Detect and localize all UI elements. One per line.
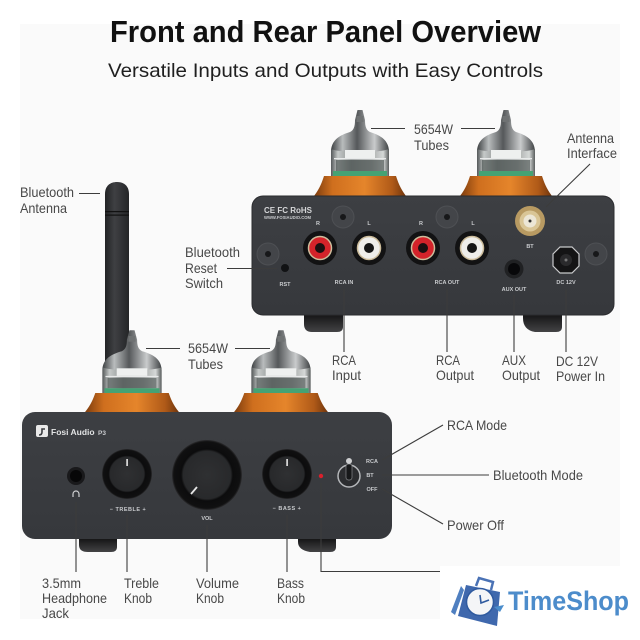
label: RCA output: Output	[436, 367, 474, 383]
bass knob: − BASS +	[273, 506, 301, 512]
reset hole	[281, 264, 289, 272]
label: bluetooth antenna: Antenna	[20, 200, 67, 216]
rear certification marks	[264, 206, 313, 220]
label: volume knob: Knob	[196, 590, 224, 606]
brand logo: Fosi Audio	[51, 427, 95, 437]
treble knob: − TREBLE +	[110, 507, 146, 513]
rear panel labels: R	[419, 221, 423, 227]
RCA output jacks	[406, 231, 489, 265]
label: rear tubes: Tubes	[414, 137, 449, 153]
rear panel labels: L	[367, 221, 371, 227]
label: volume knob: Volume	[196, 575, 239, 591]
switch labels	[366, 459, 378, 493]
rear panel labels: BT	[526, 244, 534, 250]
label: bluetooth reset switch: Switch	[185, 275, 223, 291]
label: AUX output: Output	[502, 367, 540, 383]
rear certification marks: WWW.FOSIAUDIO.COM	[264, 215, 311, 220]
label: RCA mode: RCA Mode	[447, 417, 507, 433]
volume knob: VOL	[201, 516, 213, 522]
front tubes	[85, 330, 328, 412]
RCA input jacks	[303, 231, 386, 265]
rear panel labels: R	[316, 221, 320, 227]
label: bass knob: Bass	[277, 575, 304, 591]
wordmark: TimeShop	[508, 586, 629, 616]
label: bluetooth antenna: Bluetooth	[20, 184, 74, 200]
label: AUX output: AUX	[502, 352, 527, 368]
label: bluetooth reset switch	[185, 244, 240, 291]
rear panel labels: L	[471, 221, 475, 227]
label: antenna interface: Interface	[567, 145, 617, 161]
front feet	[79, 539, 336, 552]
label: bluetooth reset switch: Bluetooth	[185, 244, 240, 260]
AUX jack	[504, 260, 524, 278]
label: antenna interface	[567, 130, 617, 161]
label: DC power	[556, 353, 605, 384]
label: rear tubes: 5654W	[414, 121, 454, 137]
label: bluetooth antenna	[20, 184, 74, 216]
bluetooth antenna	[105, 182, 129, 400]
brand logo	[36, 425, 106, 437]
rear feet	[304, 315, 562, 332]
label: DC power: DC 12V	[556, 353, 599, 369]
label: antenna interface: Antenna	[567, 130, 614, 146]
label: headphone jack	[42, 575, 107, 621]
front unit	[22, 330, 392, 552]
label: front tubes	[188, 340, 229, 372]
label: headphone jack: Headphone	[42, 590, 107, 606]
label: treble knob	[124, 575, 159, 606]
label: bass knob: Knob	[277, 590, 305, 606]
label: RCA output: RCA	[436, 352, 461, 368]
power LED	[319, 474, 323, 478]
leader lines	[76, 128, 590, 572]
DC jack	[553, 247, 579, 273]
label: RCA input	[332, 352, 361, 383]
label: front tubes: Tubes	[188, 356, 223, 372]
label: bluetooth mode: Bluetooth Mode	[493, 467, 583, 483]
label: treble knob: Knob	[124, 590, 152, 606]
label: power off: Power Off	[447, 517, 504, 533]
label: bluetooth reset switch: Reset	[185, 260, 217, 276]
headphone jack	[67, 467, 85, 497]
label: headphone jack: Jack	[42, 605, 70, 621]
label: rear tubes	[414, 121, 454, 153]
label: bass knob	[277, 575, 305, 606]
rear screws	[257, 206, 607, 265]
icon: clock bag	[451, 578, 504, 626]
switch labels: RCA	[366, 459, 378, 465]
brand logo: P3	[98, 430, 106, 437]
rear panel labels: AUX OUT	[502, 287, 527, 293]
title: Front and Rear Panel Overview	[110, 14, 542, 49]
label: volume knob	[196, 575, 239, 606]
rear certification marks: CE FC RoHS	[264, 206, 313, 215]
rear tubes	[314, 110, 552, 196]
rear panel labels: DC 12V	[556, 280, 576, 286]
rear panel body	[252, 196, 614, 315]
label: AUX output	[502, 352, 540, 383]
antenna connector	[515, 206, 545, 236]
bass knob	[262, 449, 312, 512]
rear panel labels: RST	[280, 282, 291, 288]
switch labels: BT	[366, 473, 374, 479]
switch labels: OFF	[366, 487, 378, 493]
label: RCA input: RCA	[332, 352, 357, 368]
rear panel labels: RCA IN	[335, 280, 353, 286]
TimeShop logo	[440, 566, 640, 640]
mode toggle switch	[338, 458, 360, 487]
front panel body	[22, 412, 392, 539]
label: treble knob: Treble	[124, 575, 159, 591]
label: front tubes: 5654W	[188, 340, 229, 356]
rear unit	[252, 110, 614, 332]
volume knob	[172, 440, 242, 522]
rear panel labels	[280, 221, 576, 293]
label: headphone jack: 3.5mm	[42, 575, 81, 591]
label: DC power: Power In	[556, 368, 605, 384]
label: RCA input: Input	[332, 367, 361, 383]
subtitle: Versatile Inputs and Outputs with Easy Controls	[108, 60, 543, 82]
rear panel labels: RCA OUT	[435, 280, 460, 286]
treble knob	[102, 449, 152, 513]
label: RCA output	[436, 352, 474, 383]
